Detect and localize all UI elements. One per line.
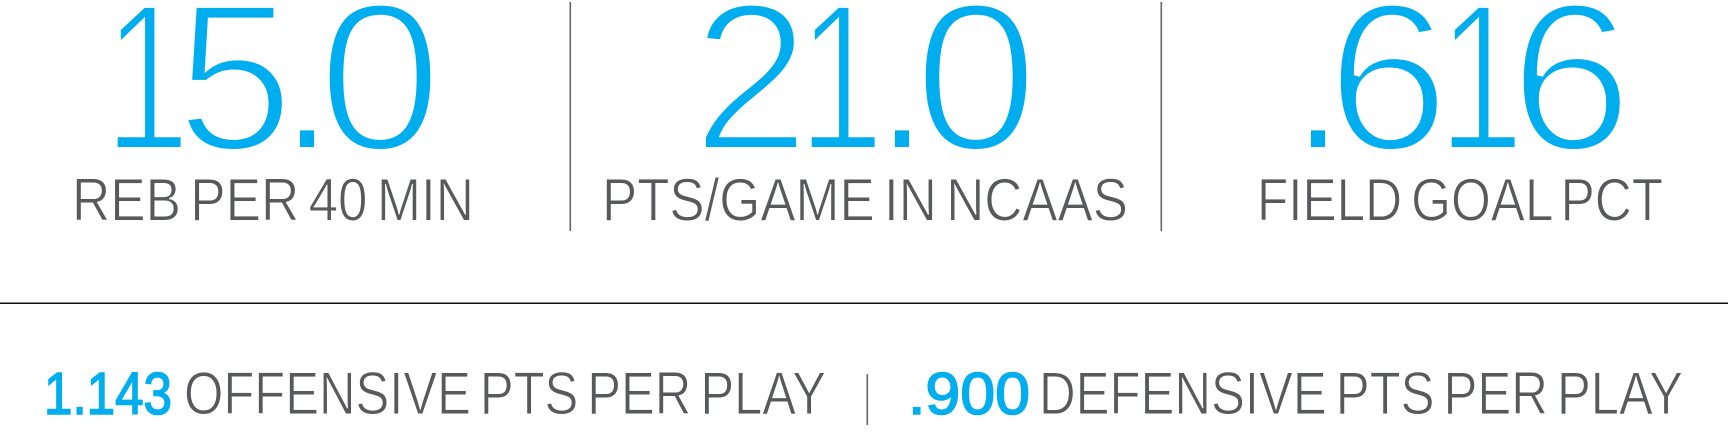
number: 15.0: [104, 0, 442, 196]
label: REB PER 40 MIN: REB PER 40 MIN: [72, 166, 474, 234]
number: .900: .900: [908, 361, 1030, 427]
label: PTS/GAME IN NCAAS: PTS/GAME IN NCAAS: [602, 166, 1128, 234]
label: FIELD GOAL PCT: FIELD GOAL PCT: [1257, 166, 1663, 234]
number: .616: [1289, 0, 1633, 195]
summary line: points per play: [44, 360, 1683, 427]
separator: [866, 374, 868, 425]
stat: field goal percentage: [1257, 0, 1663, 234]
number: 21.0: [692, 0, 1038, 196]
divider: right: [1160, 2, 1162, 231]
divider: left: [570, 2, 571, 231]
stat: rebounds per 40 minutes: [72, 0, 474, 234]
label: offensive points per play: OFFENSIVE PTS PER PLAY: [184, 360, 826, 427]
stat: points per game in NCAAs: [602, 0, 1128, 234]
number: 1.143: 1.143: [44, 361, 172, 427]
horizontal rule: [0, 302, 1728, 304]
